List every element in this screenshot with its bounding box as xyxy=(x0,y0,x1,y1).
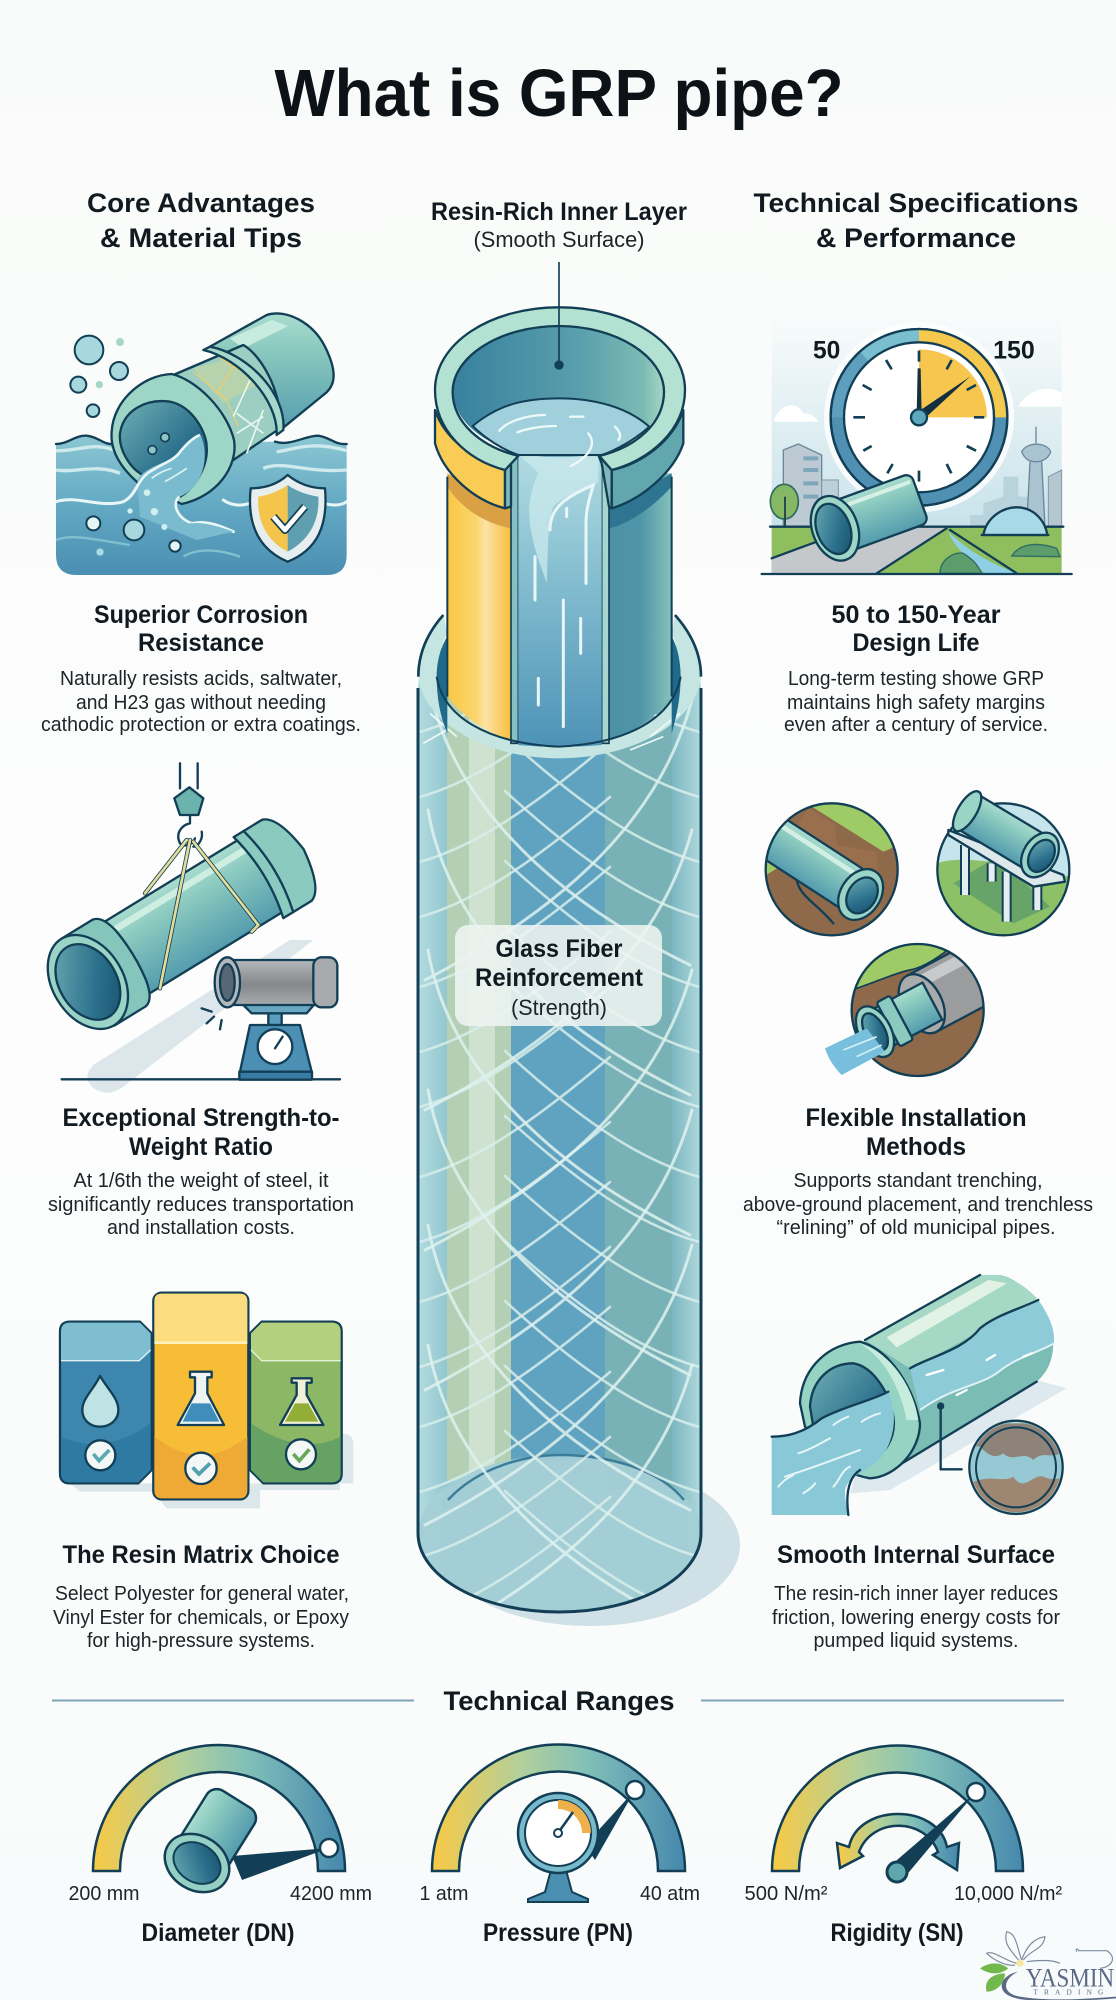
icon: lifted pipe and scale xyxy=(31,763,340,1093)
gauge: pressure xyxy=(420,1744,700,1947)
label: resin-rich inner layer: Resin-Rich Inner Layer xyxy=(431,198,687,226)
text: strength to weight xyxy=(48,1104,354,1239)
gauge: pressure: Pressure (PN) xyxy=(483,1919,633,1947)
section heading: technical ranges: Technical Ranges xyxy=(444,1686,674,1716)
text: smooth internal surface: Smooth Internal Surface xyxy=(777,1541,1055,1569)
text: superior corrosion resistance: Superior Corrosion xyxy=(94,601,308,629)
text: design life xyxy=(784,601,1048,736)
icon: resin containers xyxy=(60,1293,353,1508)
trench circle xyxy=(764,802,899,936)
pipe pouring water xyxy=(111,313,334,540)
text: superior corrosion resistance xyxy=(41,601,361,736)
pipe body xyxy=(865,1275,1054,1467)
inset: rough pipe wall xyxy=(969,1421,1063,1514)
text: superior corrosion resistance: Naturally resists acids, saltwater, xyxy=(60,668,342,690)
crane hook and slings xyxy=(145,763,258,988)
text: design life: Long-term testing showe GRP xyxy=(788,668,1044,690)
text: smooth internal surface: pumped liquid systems. xyxy=(814,1630,1018,1652)
ground xyxy=(762,507,1072,574)
gauge: rigidity xyxy=(744,1746,1062,1947)
inner back wall and water surface xyxy=(453,326,665,727)
yellow resin container xyxy=(153,1293,248,1499)
label: resin-rich inner layer: (Smooth Surface) xyxy=(474,227,644,252)
label: glass fiber reinforcement: Reinforcement xyxy=(475,964,644,992)
gauge: rigidity: Rigidity (SN) xyxy=(830,1919,964,1947)
gauge: diameter: Diameter (DN) xyxy=(142,1919,294,1947)
text: flexible installation xyxy=(743,1104,1093,1239)
label: glass fiber reinforcement xyxy=(455,925,662,1026)
text: resin matrix choice: Select Polyester for general water, xyxy=(55,1583,349,1605)
label: resin-rich inner layer xyxy=(431,198,687,252)
text: flexible installation: Flexible Installation xyxy=(806,1104,1026,1132)
numbers 50 and 150: 150 xyxy=(993,336,1035,364)
text: strength to weight: significantly reduces transportation xyxy=(48,1194,354,1216)
relining circle xyxy=(825,942,985,1078)
icon: pressure dial xyxy=(518,1793,598,1902)
text: strength to weight: At 1/6th the weight of steel, it xyxy=(74,1170,329,1192)
text: strength to weight: Exceptional Strength-to- xyxy=(62,1104,340,1132)
icon: curved double arrow xyxy=(837,1814,959,1870)
numbers 50 and 150 xyxy=(813,336,1035,364)
text: strength to weight: and installation costs. xyxy=(107,1217,295,1239)
text: resin matrix choice: The Resin Matrix Choice xyxy=(62,1541,340,1569)
heading: technical specifications xyxy=(754,188,1078,253)
shield xyxy=(250,475,326,562)
logo: yasmin trading: TRADING xyxy=(1033,1987,1104,1996)
gauge: diameter: 4200 mm xyxy=(290,1883,372,1905)
text: design life: 50 to 150-Year xyxy=(832,601,1001,629)
ground shadow xyxy=(440,1464,740,1626)
title: What is GRP pipe? xyxy=(274,56,844,131)
text: smooth internal surface xyxy=(772,1541,1060,1652)
steel pipe on scale xyxy=(202,957,337,1080)
heading: technical specifications: Technical Specifications xyxy=(754,188,1078,218)
heading: core advantages: & Material Tips xyxy=(100,223,302,253)
heading: core advantages: Core Advantages xyxy=(87,188,315,218)
city skyline xyxy=(770,427,1062,527)
text: flexible installation: above-ground placement, and trenchless xyxy=(743,1194,1093,1216)
gauge: diameter xyxy=(68,1745,372,1947)
numbers 50 and 150: 50 xyxy=(813,336,840,364)
inner pipe: cutaway layers xyxy=(418,262,701,758)
leader line xyxy=(556,262,561,365)
text: superior corrosion resistance: cathodic protection or extra coatings. xyxy=(41,714,361,736)
text: superior corrosion resistance: Resistance xyxy=(138,629,264,657)
gauge: pressure: 1 atm xyxy=(420,1883,468,1905)
text: flexible installation: Methods xyxy=(866,1133,966,1161)
above ground circle xyxy=(937,786,1070,937)
icon: small pipe xyxy=(154,1781,266,1904)
label: glass fiber reinforcement: Glass Fiber xyxy=(496,935,623,963)
clock xyxy=(824,322,1014,512)
gauge: rigidity: 500 N/m² xyxy=(744,1883,828,1905)
text: superior corrosion resistance: and H23 gas without needing xyxy=(76,692,326,714)
text: resin matrix choice xyxy=(53,1541,349,1652)
text: smooth internal surface: The resin-rich inner layer reduces xyxy=(774,1583,1058,1605)
text: resin matrix choice: Vinyl Ester for chemicals, or Epoxy xyxy=(53,1607,349,1629)
gauge: rigidity: 10,000 N/m² xyxy=(954,1883,1062,1905)
text: design life: Design Life xyxy=(852,629,980,657)
text: design life: even after a century of service. xyxy=(784,714,1048,736)
text: flexible installation: “relining” of old municipal pipes. xyxy=(776,1217,1056,1239)
gauge: pressure: 40 atm xyxy=(640,1883,700,1905)
logo: yasmin trading xyxy=(980,1932,1116,2000)
icon: corrosion resistance xyxy=(56,313,347,575)
text: strength to weight: Weight Ratio xyxy=(129,1133,273,1161)
heading: core advantages xyxy=(87,188,315,253)
text: design life: maintains high safety margins xyxy=(787,692,1045,714)
text: flexible installation: Supports standant trenching, xyxy=(794,1170,1042,1192)
green resin container xyxy=(250,1322,342,1483)
leader line to inset xyxy=(941,1406,962,1469)
icon: installation methods xyxy=(748,786,1070,1077)
icon: smooth internal surface xyxy=(772,1275,1067,1515)
gauge: diameter: 200 mm xyxy=(68,1883,140,1905)
icon: design life clock xyxy=(762,320,1072,574)
top rim of inner pipe xyxy=(435,307,685,508)
outer glass fiber pipe xyxy=(412,606,707,1645)
label: glass fiber reinforcement: (Strength) xyxy=(511,995,607,1020)
text: resin matrix choice: for high-pressure systems. xyxy=(87,1630,315,1652)
text: smooth internal surface: friction, lowering energy costs for xyxy=(772,1607,1060,1629)
heading: technical specifications: & Performance xyxy=(816,223,1016,253)
GRP pipe hanging xyxy=(31,806,331,1044)
flowing water xyxy=(772,1392,894,1515)
pipe on ground xyxy=(802,466,931,567)
pipe collar and mouth xyxy=(800,1342,920,1478)
central pipe diagram xyxy=(412,262,740,1645)
blue resin container xyxy=(60,1322,152,1483)
bubbles xyxy=(70,336,181,556)
